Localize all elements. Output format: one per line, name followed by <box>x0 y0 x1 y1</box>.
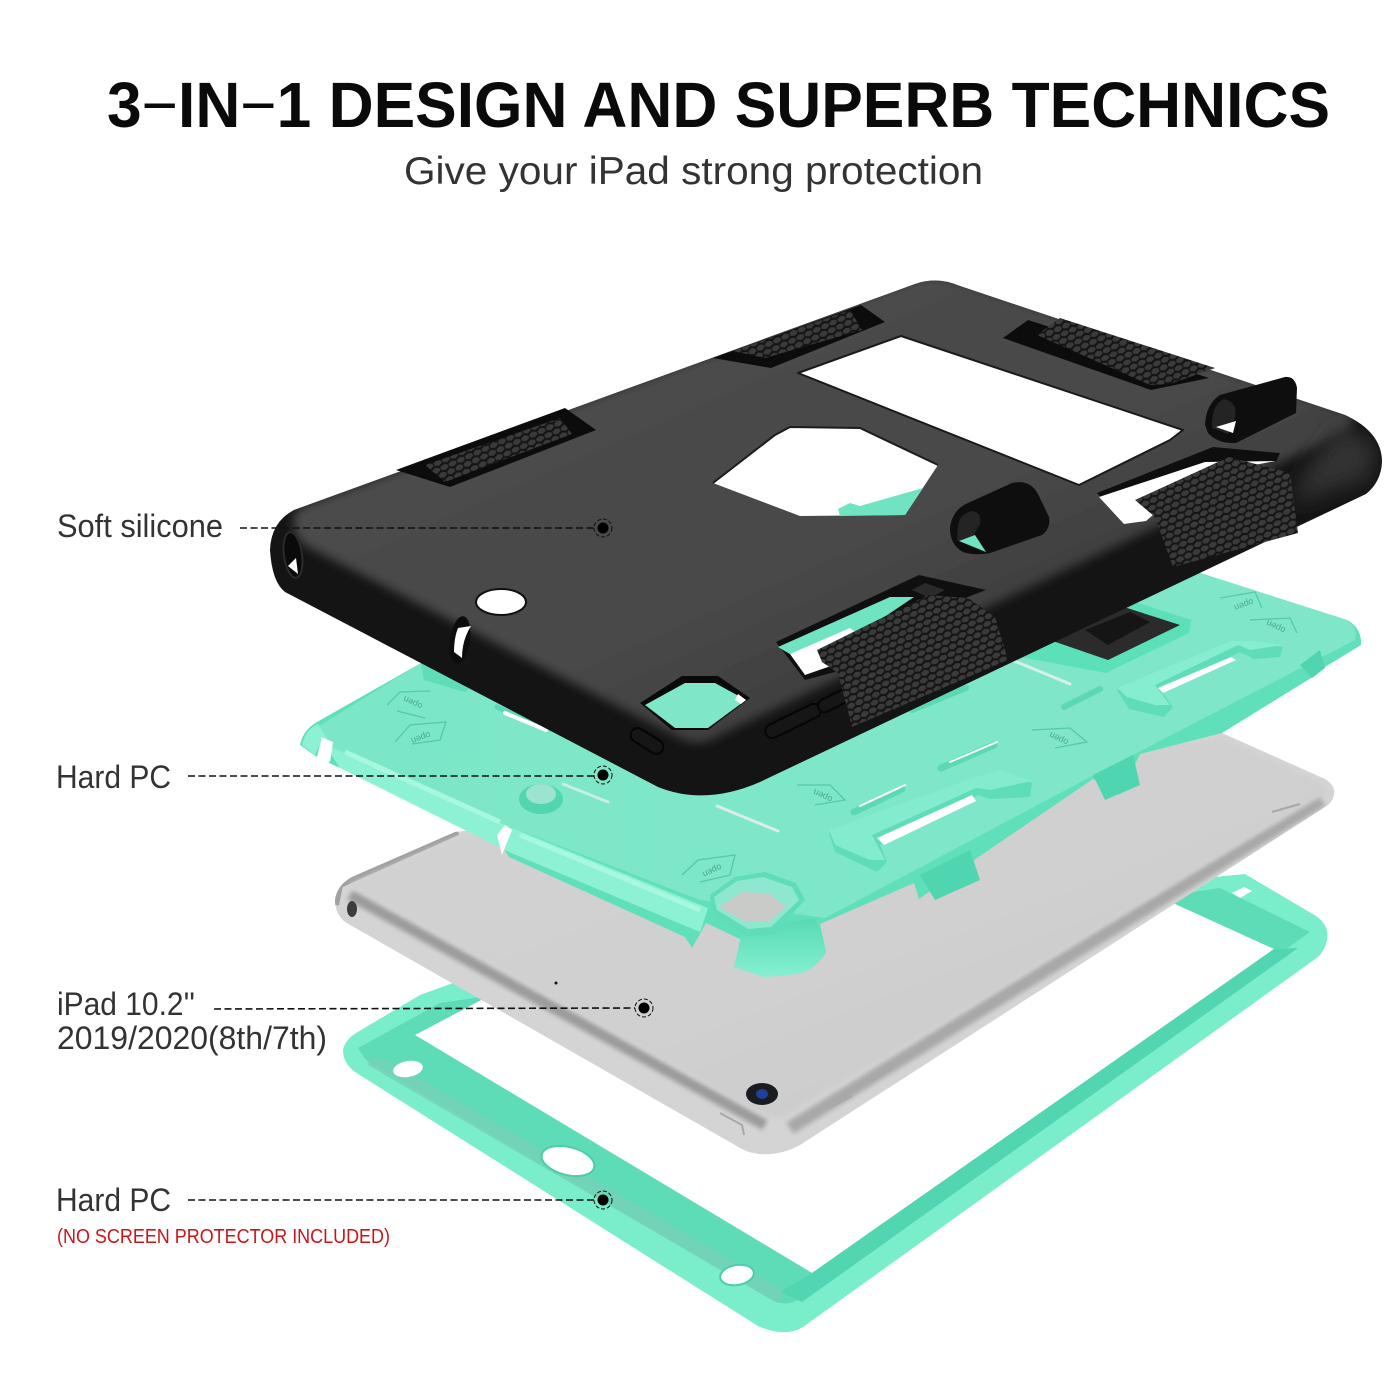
callout: soft silicone: Soft silicone <box>57 508 223 544</box>
frame top right notch <box>1232 887 1252 898</box>
kickstand recess <box>1021 600 1191 673</box>
hole: left side port <box>281 531 305 579</box>
top layer: soft silicone black case <box>270 275 1382 795</box>
iPad buttons <box>720 804 1300 1135</box>
callout: hard PC frame: Hard PC <box>56 1182 171 1218</box>
callout: soft silicone <box>57 508 612 544</box>
frame hole left <box>392 1059 424 1079</box>
middle layer: hard PC shell <box>300 500 1361 977</box>
hole: side slot <box>447 615 473 665</box>
open arrow marks: open <box>1265 618 1287 635</box>
strap loop right <box>1205 377 1297 443</box>
open arrow marks: open <box>402 694 424 711</box>
callout: hard PC frame <box>56 1182 612 1218</box>
callout: iPad model: iPad 10.2'' <box>57 986 195 1022</box>
hole: lower stand window <box>776 575 986 680</box>
open arrow marks <box>402 597 1287 879</box>
warning note: (NO SCREEN PROTECTOR INCLUDED) <box>57 1226 390 1248</box>
frame inner shaded strip <box>368 1057 787 1303</box>
iPad back face <box>350 738 1326 1117</box>
iPad body <box>335 733 1334 1154</box>
shell corner ring <box>710 872 805 936</box>
mint piece seen through camera hole <box>838 488 923 516</box>
callout: hard PC shell: Hard PC <box>56 759 171 795</box>
hole: camera octagon <box>713 427 938 516</box>
hole: corner octagon <box>640 676 750 730</box>
stand arm upper <box>1117 641 1283 717</box>
shell white notch <box>321 737 333 762</box>
shell round hole ring <box>519 784 563 814</box>
iPad microphone dot <box>554 982 558 984</box>
shell rim highlight <box>345 752 700 910</box>
frame hole right <box>719 1262 755 1288</box>
title: 3−IN−1 DESIGN AND SUPERB TECHNICS <box>107 69 1330 141</box>
hole: right side window <box>1097 447 1280 524</box>
subtitle: Give your iPad strong protection <box>404 150 983 193</box>
strap loop centre <box>950 482 1049 554</box>
case right corner highlight <box>1290 425 1376 505</box>
front frame: hard PC bumper <box>343 874 1328 1332</box>
shell lighter rim lower left <box>302 724 708 932</box>
shell slots <box>497 660 1100 831</box>
grip: upper left slot <box>396 408 596 487</box>
volume buttons <box>763 681 867 740</box>
shell side clip gap <box>497 825 512 855</box>
shell hump top left <box>421 663 480 692</box>
iPad camera <box>746 1083 778 1105</box>
open arrow marks: open <box>1048 730 1070 747</box>
hole: home button <box>476 589 526 615</box>
open arrow marks: open <box>812 787 834 804</box>
shell top face <box>316 500 1356 918</box>
case top face with soft edges <box>293 275 1376 742</box>
iPad microphone hole <box>347 901 357 917</box>
open arrow marks: open <box>701 862 723 879</box>
frame hole centre <box>538 1141 598 1181</box>
callout: hard PC shell <box>56 759 612 795</box>
iPad edge shading <box>336 800 1322 1128</box>
frame lip right side <box>780 948 1298 1302</box>
grip: top centre slot <box>713 305 885 368</box>
open arrow marks: open <box>410 730 432 746</box>
callout: iPad model: 2019/2020(8th/7th) <box>57 1020 327 1056</box>
open arrow marks: open <box>1233 597 1255 613</box>
stand arm lower <box>829 770 1032 872</box>
frame inner face <box>358 888 1310 1304</box>
hole: stand window <box>798 336 1183 485</box>
grip: top right slot <box>1003 318 1215 390</box>
grip: lower edge wrap <box>817 595 1008 727</box>
shell clips lower right <box>920 650 1325 900</box>
grip: right edge wrap <box>1135 457 1298 567</box>
open arrow outlines <box>387 592 1297 882</box>
power button <box>628 726 666 756</box>
callout: iPad model <box>57 986 653 1056</box>
shell corner tab <box>734 918 826 977</box>
